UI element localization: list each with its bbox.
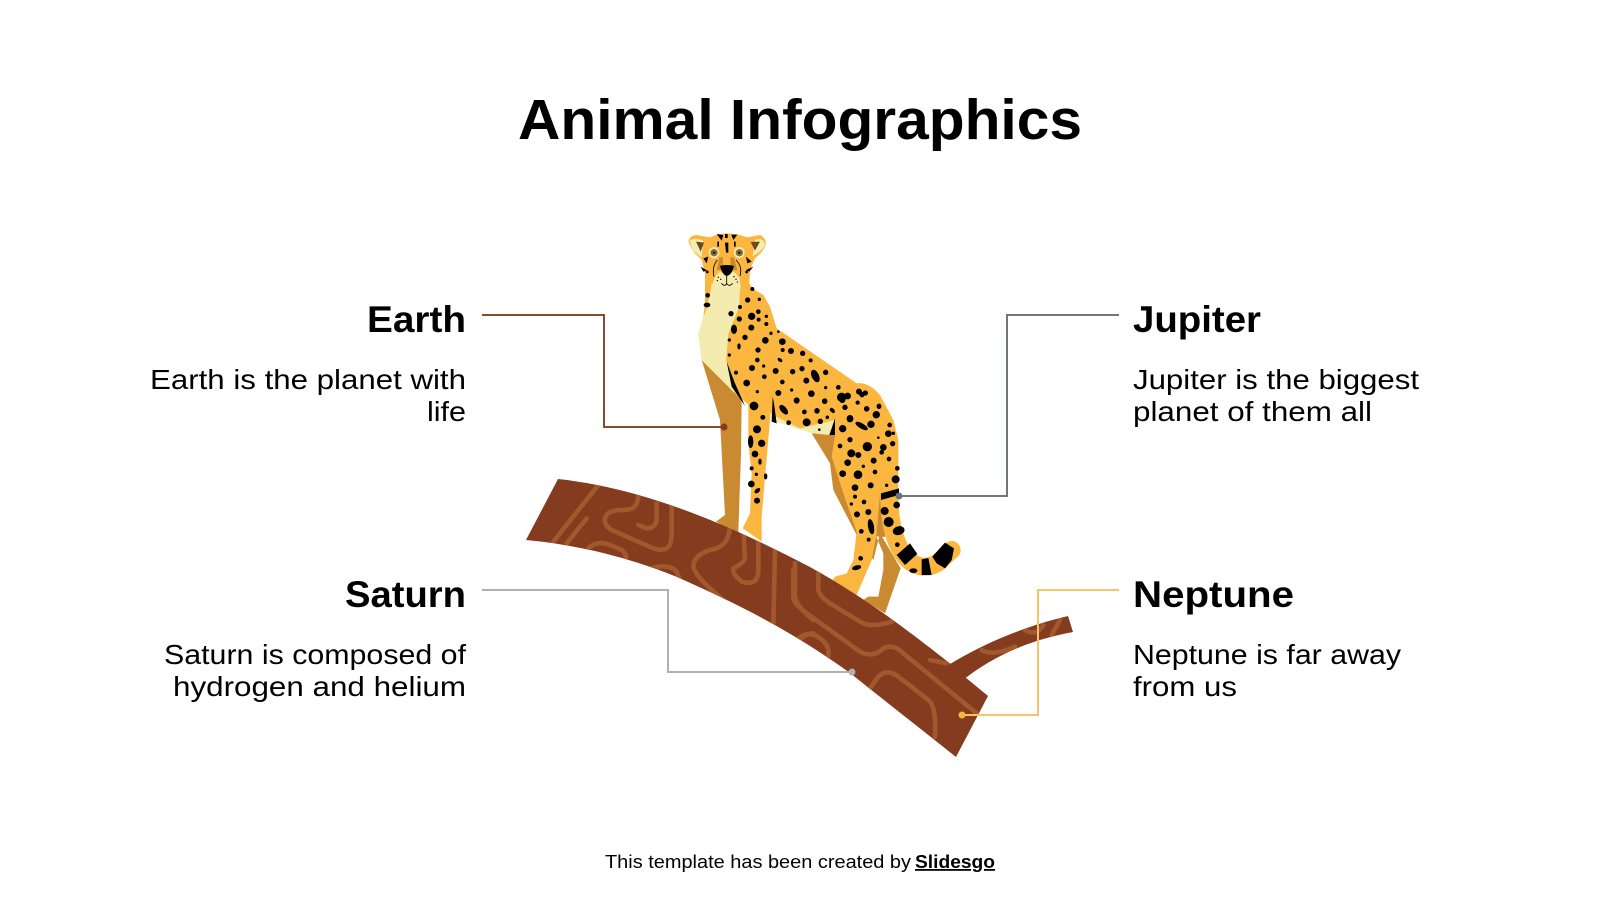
- branch wood grain: [553, 485, 1060, 737]
- footer credit: Slidesgo: [915, 852, 995, 872]
- text block: Jupiter: Jupiter: [1133, 299, 1261, 340]
- title: Animal Infographics: [518, 88, 1082, 152]
- chest: [698, 282, 740, 393]
- footer credit: This template has been created by: [605, 852, 911, 872]
- text block: Saturn: hydrogen and helium: [173, 671, 466, 702]
- dark body marks: [727, 362, 835, 435]
- text block: Saturn: Saturn: [345, 574, 466, 615]
- text block: Neptune: [1133, 574, 1401, 702]
- connector: Neptune: [958, 590, 1119, 718]
- text block: Jupiter: planet of them all: [1133, 396, 1372, 427]
- ears: [689, 239, 765, 257]
- text block: Jupiter: [1133, 299, 1419, 427]
- belly: [776, 417, 835, 435]
- near front leg shadow: [702, 360, 742, 537]
- connector: Jupiter: [896, 315, 1119, 500]
- text block: Saturn: [164, 574, 466, 702]
- head, body and hind leg: [688, 233, 898, 595]
- text block: Saturn: Saturn is composed of: [164, 639, 466, 670]
- connector: Saturn: [482, 590, 856, 676]
- connector: Earth: [482, 315, 728, 430]
- text block: Earth: life: [427, 396, 466, 427]
- text block: Neptune: Neptune is far away: [1133, 639, 1401, 670]
- text block: Earth: Earth is the planet with: [150, 364, 466, 395]
- illustration: branch: [526, 479, 1073, 757]
- text block: Earth: Earth: [367, 299, 466, 340]
- text block: Jupiter: Jupiter is the biggest: [1133, 364, 1419, 395]
- far hind leg: [812, 433, 901, 613]
- text block: Earth: [150, 299, 466, 427]
- illustration: cheetah: [688, 233, 954, 613]
- text block: Neptune: from us: [1133, 671, 1237, 702]
- text block: Neptune: Neptune: [1133, 574, 1294, 615]
- spots: [704, 287, 899, 571]
- front leg: [743, 400, 772, 542]
- face: [701, 234, 753, 288]
- tail: [880, 488, 954, 575]
